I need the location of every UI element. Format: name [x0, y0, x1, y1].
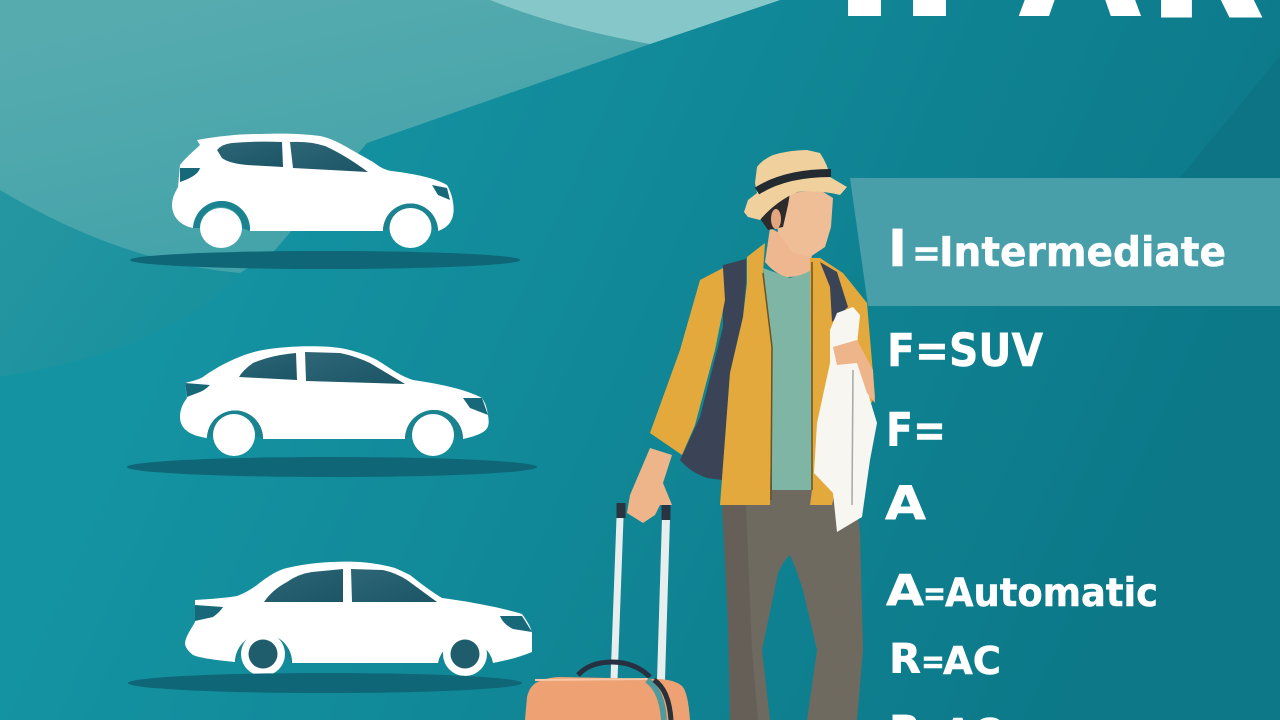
- legend: F SUV: F=SUV: [887, 324, 1043, 377]
- legend: A automatic: Automatic: [945, 571, 1158, 616]
- towel: [814, 307, 877, 532]
- legend: I: Intermediate: [939, 228, 1226, 276]
- car: hatchback: [172, 134, 454, 248]
- legend: I: [888, 220, 1226, 279]
- legend: I: =: [912, 231, 941, 275]
- hat: [744, 150, 847, 220]
- backpack strap right: [820, 262, 848, 322]
- hair: [761, 193, 790, 230]
- jacket seams: [763, 262, 812, 500]
- trousers: [722, 488, 863, 720]
- legend: R AC: =: [921, 642, 945, 681]
- jacket body right: [810, 258, 875, 505]
- legend: R AC: [889, 635, 1001, 683]
- legend: R AC cropped: [889, 707, 1001, 720]
- traveller: [627, 150, 877, 720]
- highlight band: [850, 178, 1280, 306]
- legend: [885, 220, 1226, 720]
- jacket sleeve left: [650, 268, 725, 455]
- jacket body left: [720, 243, 772, 505]
- suitcase: [525, 503, 690, 720]
- legend: A automatic: A: [886, 566, 925, 616]
- legend: A automatic: [886, 566, 1158, 616]
- legend: A: A: [885, 476, 926, 530]
- towel fold: [852, 370, 853, 505]
- title: [832, 0, 1263, 58]
- shadow: hatchback: [130, 251, 520, 269]
- shadow: sedan: [127, 457, 537, 477]
- neck: [765, 228, 812, 277]
- legend: A automatic: =: [923, 574, 946, 614]
- hand left: [627, 448, 672, 523]
- hat band: [757, 173, 831, 191]
- legend: R AC: R: [889, 635, 921, 683]
- legend: I: I: [888, 220, 907, 279]
- hand right: [833, 340, 875, 403]
- car: sedan: [180, 346, 489, 456]
- trousers shading: [722, 505, 758, 720]
- legend: F: F=: [886, 403, 946, 457]
- backpack: [680, 259, 746, 480]
- legend: R AC: AC: [943, 639, 1001, 683]
- ear: [771, 209, 781, 229]
- t-shirt: [763, 268, 812, 490]
- shadow: saloon: [128, 673, 522, 693]
- face: [775, 190, 833, 257]
- car: saloon: [185, 562, 532, 676]
